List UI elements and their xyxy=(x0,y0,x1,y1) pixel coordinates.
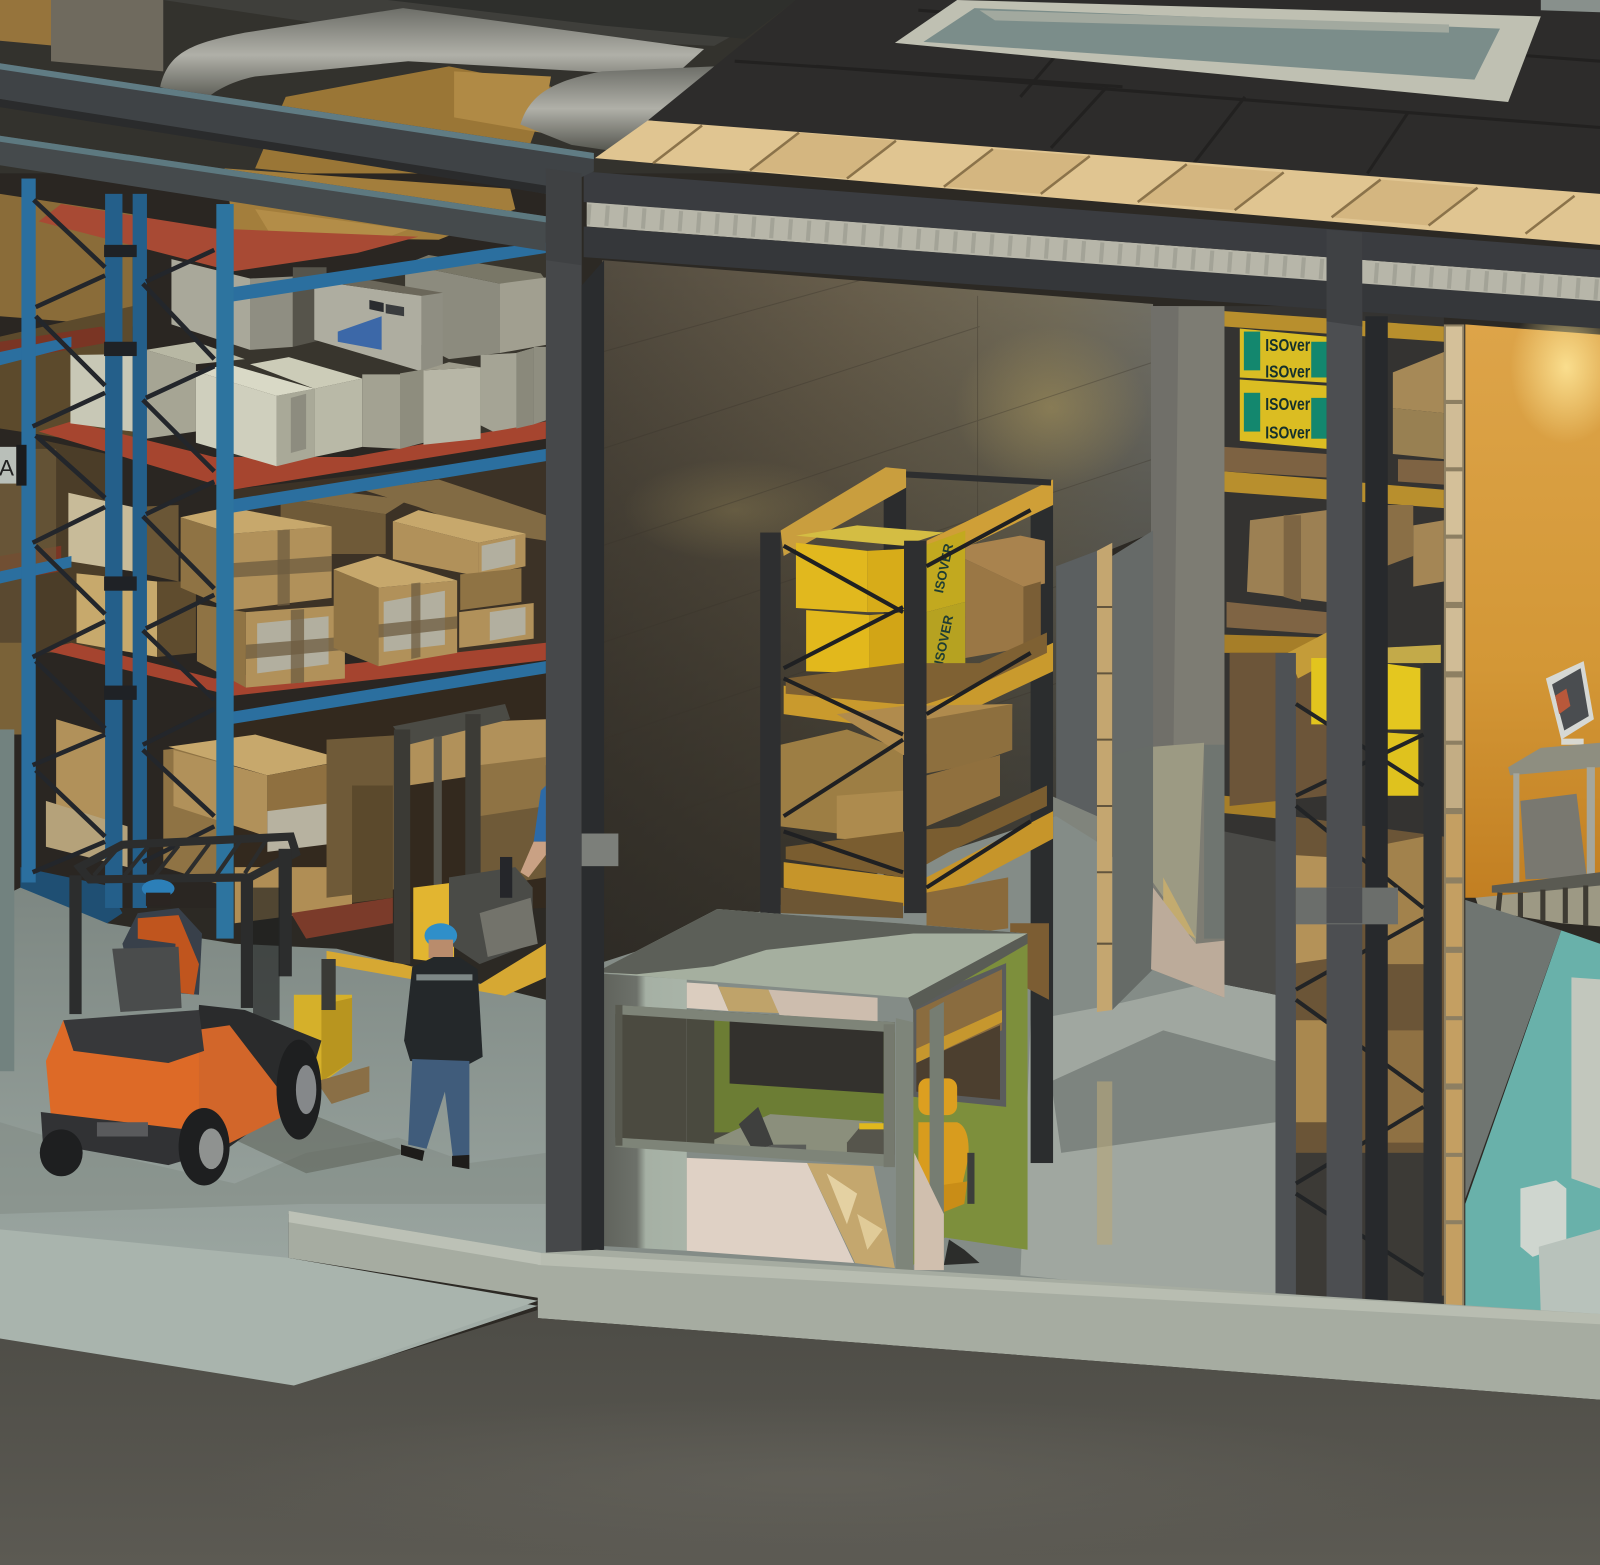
yellow shelf beams xyxy=(1224,311,1444,342)
bathroom walls xyxy=(1465,900,1600,1326)
isover cartons: ISOver xyxy=(1265,394,1310,414)
isover cartons: ISOver xyxy=(1265,335,1310,355)
corner post xyxy=(896,1018,913,1270)
center room back wall xyxy=(597,260,1153,964)
boxes upper shelf: ISOVER xyxy=(931,613,956,666)
wood stud wall section xyxy=(1444,324,1464,1312)
shelf beam 2 xyxy=(784,811,1053,906)
asphalt road xyxy=(0,1310,1600,1565)
steel beams xyxy=(584,171,1600,277)
side wall xyxy=(913,937,1028,1270)
floor slats xyxy=(1476,886,1600,926)
blue rack uprights and beams xyxy=(0,179,546,939)
duct xyxy=(160,8,704,102)
concrete curb xyxy=(289,1211,1600,1400)
top yellow beams xyxy=(781,467,906,556)
yellow pallet jack xyxy=(294,959,369,1104)
pink and OSB panels xyxy=(687,982,895,1268)
left wall stub xyxy=(0,729,14,1071)
body xyxy=(41,1005,321,1165)
boxes level 2: kraft cartons xyxy=(0,449,546,688)
aisle sign xyxy=(0,445,27,486)
loading apron xyxy=(0,1229,538,1385)
isover cartons xyxy=(1240,329,1327,449)
roof surface xyxy=(648,0,1600,196)
duct bend xyxy=(520,66,714,151)
concrete pillar with wall cut xyxy=(1097,306,1224,1012)
toilet xyxy=(1520,1180,1600,1322)
wood pallets xyxy=(1224,447,1444,635)
interior xyxy=(615,1005,895,1165)
office interior right xyxy=(1444,291,1600,1326)
driver xyxy=(122,879,202,995)
boxes lower shelf xyxy=(781,877,1049,1000)
floor: left warehouse xyxy=(0,888,546,1387)
boxes middle shelf xyxy=(781,704,1012,842)
skylight xyxy=(895,0,1600,102)
foreground rack xyxy=(1276,633,1444,1306)
overhead guard xyxy=(69,837,296,1020)
right column xyxy=(1327,230,1362,1311)
wood stud strip xyxy=(1097,543,1112,1012)
front uprights xyxy=(760,533,781,920)
laptop xyxy=(739,1107,806,1157)
wrapped stack on floor xyxy=(1224,831,1276,995)
center rack xyxy=(760,467,1053,1163)
window frame xyxy=(615,1005,895,1167)
stacker truck xyxy=(327,704,546,996)
office booth xyxy=(596,909,1028,1270)
shelf beam 1 xyxy=(784,643,1053,730)
column tops xyxy=(546,168,582,265)
ceiling area with ducts xyxy=(0,0,796,194)
back shelving boxes xyxy=(0,168,546,918)
left column xyxy=(546,168,582,1253)
desk with monitor xyxy=(1492,661,1600,893)
printer xyxy=(847,1123,884,1159)
boxes level 1: white cartons xyxy=(70,255,546,466)
isover cartons: ISOver xyxy=(1265,423,1310,443)
boxes upper shelf xyxy=(796,525,1045,681)
side door post xyxy=(930,1002,944,1263)
boxes bottom level xyxy=(0,643,546,939)
worker in helmet xyxy=(401,923,483,1169)
forklift xyxy=(40,837,321,1185)
left panel xyxy=(596,973,687,1251)
steel columns xyxy=(546,168,1398,1311)
isover cartons: ISOver xyxy=(1265,361,1310,381)
isover side labels: ISOVER xyxy=(931,542,956,594)
right bay storage xyxy=(1224,306,1444,1311)
roof xyxy=(0,0,1600,329)
center floor xyxy=(597,816,1276,1304)
wheels xyxy=(40,1040,321,1185)
pallet levels xyxy=(0,204,546,696)
booth roof xyxy=(596,909,1028,1010)
rear uprights xyxy=(884,469,906,898)
operator arm xyxy=(534,786,546,842)
kraft cartons xyxy=(1230,352,1444,806)
orange wall xyxy=(1465,324,1600,898)
seat xyxy=(112,947,182,1012)
office chair xyxy=(918,1078,980,1265)
panel: left warehouse storage xyxy=(0,0,796,939)
timber edge xyxy=(595,120,1600,245)
corrugated sheet xyxy=(587,202,1600,302)
